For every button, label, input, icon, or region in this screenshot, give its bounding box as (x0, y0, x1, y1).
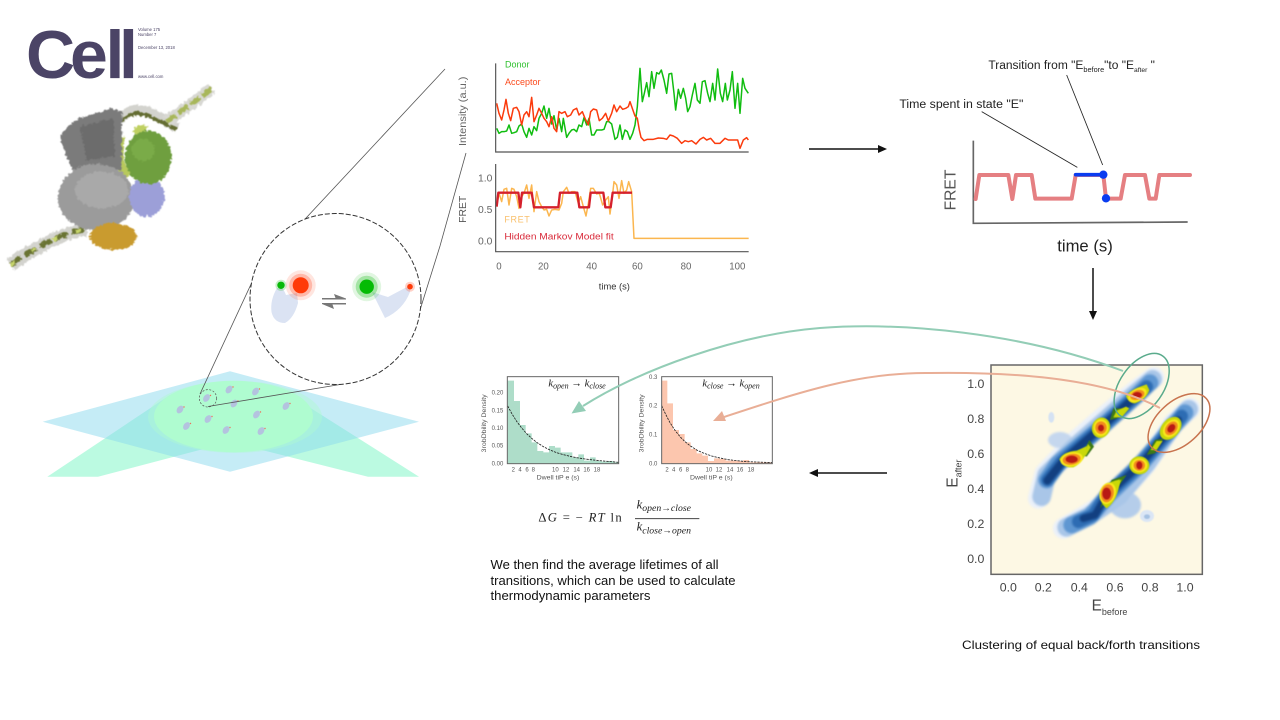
open to close rate label: open (553, 381, 569, 390)
density x tick labels: 0.2 (1035, 581, 1052, 595)
arrow: density map to histograms (809, 469, 887, 477)
time axis label: time (s) (599, 281, 630, 291)
density y tick labels: 0.0 (967, 552, 984, 566)
x axis label: E before: E (1092, 598, 1102, 615)
density x tick labels: 1.0 (1176, 581, 1194, 595)
open conformation (352, 272, 415, 318)
close to open x axis ticks: 14 (727, 467, 734, 473)
cover issue details (138, 27, 175, 79)
dwell annotation: Time spent in state "E" (899, 97, 1023, 111)
selected molecule marker (199, 390, 217, 407)
density y tick labels: 1.0 (967, 377, 984, 391)
schematic trace (976, 175, 1190, 199)
close to open y label: 3robDbility Density (638, 394, 645, 452)
density y tick labels: 0.6 (967, 447, 984, 461)
FRET plot (458, 164, 749, 291)
time tick labels: 60 (632, 261, 643, 272)
open to close x label: Dwell tiP e (s) (537, 475, 579, 482)
small isolated contour islands (1048, 412, 1154, 522)
lower ridge (1063, 408, 1190, 528)
intensity plot (458, 60, 749, 152)
open to close y axis ticks (492, 391, 504, 467)
orange selection ellipse (1137, 382, 1221, 464)
y axis label: E after: E (944, 477, 961, 488)
cover issue details: Volume 175 (138, 27, 161, 32)
cover issue details: December 13, 2018 (138, 45, 175, 50)
free energy equation: k (637, 497, 642, 511)
leader line: dwell (982, 112, 1077, 167)
explanatory text: lifetimes: thermodynamic parameters (490, 589, 650, 603)
transition start point (1099, 170, 1107, 179)
explanatory text: lifetimes: We then find the average lifetimes of all (490, 558, 718, 572)
schematic time label: time (s) (1057, 237, 1113, 256)
illuminated field (154, 381, 313, 452)
close to open rate label: → (723, 378, 739, 389)
open to close frame (507, 377, 619, 464)
open to close y axis ticks: 0.00 (492, 461, 504, 467)
hidden Markov model fit (497, 193, 632, 207)
transition annotation: after (1134, 67, 1148, 74)
free energy equation: k (637, 520, 642, 534)
density x tick labels (1000, 581, 1194, 595)
open to close rate label: close (589, 381, 606, 390)
acceptor trace (497, 97, 748, 148)
caption: clustering: Clustering of equal back/forth transitions (962, 638, 1200, 652)
density x tick labels: 0.0 (1000, 581, 1017, 595)
FRET legend: FRET (504, 214, 530, 224)
highlighted state dwell (1076, 169, 1103, 180)
time tick labels (496, 261, 745, 272)
dashed magnifier outline (250, 214, 421, 384)
leader line: transition (1067, 75, 1103, 165)
zoom lines from sample field to FRET plots (200, 69, 466, 406)
close to open x axis ticks (665, 467, 755, 473)
green selection ellipse (1103, 344, 1180, 428)
density contours (1038, 377, 1190, 528)
arrow: schematic to density map (1089, 268, 1097, 320)
blue plane (43, 371, 419, 472)
close to open x axis ticks: 12 (716, 467, 723, 473)
transition density plot (944, 344, 1221, 617)
open to close x axis ticks (512, 467, 601, 473)
open to close x axis ticks: 8 (532, 467, 536, 473)
close to open y axis ticks: 0.1 (649, 432, 658, 438)
open to close x axis ticks: 18 (594, 467, 601, 473)
FRET tick labels: 0.0 (478, 236, 493, 247)
free energy equation: close→open (642, 526, 691, 536)
y axis label: E after: after (954, 459, 964, 477)
density y tick labels (967, 377, 984, 566)
close to open exponential fit (662, 406, 772, 463)
transition annotation: " (1147, 58, 1155, 72)
illuminated field outer ring (148, 381, 322, 453)
green and yellow saddles between peaks (1082, 407, 1163, 508)
open to close rate label: → (569, 378, 585, 389)
time tick labels: 100 (729, 261, 745, 272)
open to close rate label: k (585, 378, 589, 389)
transition annotation: Transition from "E (988, 58, 1083, 72)
journal cover: Cell (11, 17, 212, 265)
x axis label: E before: before (1102, 607, 1127, 617)
intensity and FRET traces (458, 60, 749, 291)
intensity axes (496, 63, 749, 152)
transition end point (1102, 194, 1110, 202)
closed conformation (271, 270, 316, 323)
HMM legend: Hidden Markov Model fit (504, 231, 614, 241)
close to open rate label: close (707, 381, 724, 390)
histogram: close to open (638, 375, 772, 482)
open to close y axis ticks: 0.10 (492, 426, 504, 432)
density x tick labels: 0.8 (1141, 581, 1159, 595)
surface molecules (175, 384, 291, 436)
open to close y axis ticks: 0.05 (492, 444, 504, 450)
free energy equation: ΔG = − RT ln (538, 511, 622, 525)
close to open x axis ticks: 6 (679, 467, 683, 473)
donor legend: Donor (505, 60, 529, 70)
close to open y axis ticks: 0.3 (649, 375, 658, 381)
FRET axes (496, 164, 749, 252)
cover issue details: Number 7 (138, 32, 157, 37)
density x tick labels: 0.6 (1106, 581, 1124, 595)
magnified molecule circle (250, 214, 421, 384)
open to close x axis ticks: 6 (525, 467, 529, 473)
close to open y axis ticks: 0.2 (649, 404, 658, 410)
equilibrium arrows (322, 294, 346, 309)
explanatory text: lifetimes: transitions, which can be used to calculate (490, 574, 736, 588)
FRET trace (497, 181, 749, 238)
close to open x label: Dwell tiP e (s) (690, 475, 733, 482)
dwell time histograms (481, 375, 772, 536)
FRET tick labels (478, 173, 493, 247)
transition annotation: "to "E (1104, 58, 1134, 72)
close to open x axis ticks: 18 (748, 467, 755, 473)
time tick labels: 20 (538, 261, 549, 272)
open to close rate label: k (548, 378, 553, 389)
open to close x axis ticks: 14 (573, 467, 581, 473)
donor trace (497, 68, 748, 139)
histogram: open to close (481, 377, 619, 482)
open to close x axis ticks: 12 (563, 467, 570, 473)
open to close y axis ticks: 0.20 (492, 391, 504, 397)
acceptor legend: Acceptor (505, 77, 540, 87)
FRET tick labels: 1.0 (478, 173, 493, 184)
close to open y axis ticks (649, 375, 658, 467)
upper ridge (1038, 377, 1154, 498)
cover image: protein complex on DNA (11, 88, 212, 265)
open to close x axis ticks: 10 (552, 467, 559, 473)
density x tick labels: 0.4 (1071, 581, 1088, 595)
close to open rate label: k (702, 378, 707, 389)
arrow: traces to schematic (809, 145, 887, 153)
close to open x axis ticks: 4 (672, 467, 676, 473)
schematic axes (973, 141, 1188, 223)
density y tick labels: 0.2 (967, 517, 984, 531)
free energy equation (538, 497, 699, 536)
FRET axis label: FRET (458, 195, 469, 223)
curved salmon arrow: cluster to histogram (713, 373, 1160, 421)
plot border (991, 365, 1202, 574)
close to open frame (662, 377, 772, 464)
open to close y axis ticks: 0.15 (492, 408, 504, 414)
cover masthead: Cell logo: Cell (26, 17, 138, 93)
schematic FRET state trace (899, 58, 1190, 256)
plot background (991, 365, 1202, 574)
schematic FRET label: FRET (942, 169, 959, 210)
close to open rate label: k (739, 378, 744, 389)
intensity axis label: Intensity (a.u.) (458, 77, 469, 146)
curved green arrow: cluster to histogram (572, 326, 1123, 414)
open to close x axis ticks: 4 (518, 467, 522, 473)
time tick labels: 80 (681, 261, 691, 272)
green plane (47, 395, 419, 477)
free energy equation: open→close (642, 504, 691, 514)
surface illustration: planes and immobilised molecules (43, 371, 419, 477)
open to close y label: 3robDbility Density (481, 394, 488, 452)
close to open bars (662, 381, 772, 464)
close to open rate label: open (744, 381, 760, 390)
close to open x axis ticks: 2 (665, 467, 669, 473)
time tick labels: 0 (496, 261, 502, 272)
density peaks (1059, 384, 1186, 508)
cover issue details: www.cell.com (138, 74, 164, 79)
close to open x axis ticks: 10 (706, 467, 713, 473)
density y tick labels: 0.8 (967, 412, 984, 426)
time tick labels: 40 (586, 261, 597, 272)
FRET tick labels: 0.5 (478, 205, 493, 216)
transition annotation: before (1083, 65, 1104, 74)
close to open x axis ticks: 16 (737, 467, 744, 473)
density y tick labels: 0.4 (967, 482, 984, 496)
open to close x axis ticks: 16 (583, 467, 591, 473)
open to close exponential fit (508, 406, 619, 462)
close to open y axis ticks: 0.0 (649, 461, 658, 467)
close to open x axis ticks: 8 (686, 467, 690, 473)
open to close x axis ticks: 2 (512, 467, 516, 473)
open to close bars (508, 381, 619, 464)
